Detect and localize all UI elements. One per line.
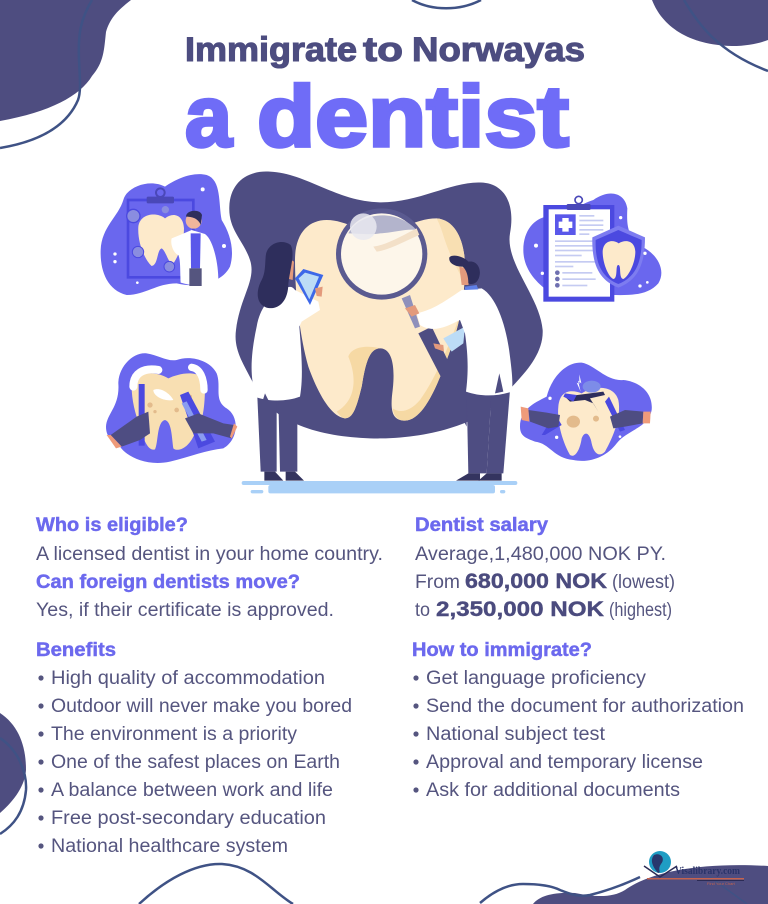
answer: licensed dentist: A licensed dentist in your home country. xyxy=(36,544,383,565)
highest salary xyxy=(415,598,672,621)
dentist: man with magnifier xyxy=(405,256,512,481)
background corner: top center arc xyxy=(412,0,481,8)
answer: certificate: Yes, if their certificate is approved. xyxy=(36,600,334,621)
list: benefits: Free post-secondary education xyxy=(51,808,326,829)
list: how to immigrate: Send the document for authorization xyxy=(426,696,744,717)
background corner: left middle blob xyxy=(0,713,26,834)
highest salary: 2,350,000 NOK xyxy=(436,598,604,621)
list: how to immigrate: National subject test xyxy=(426,724,606,745)
illustration: dentist with tooth chart xyxy=(101,174,232,295)
list: benefits xyxy=(36,640,352,857)
list: how to immigrate: Ask for additional documents xyxy=(426,780,680,801)
dark blob backdrop xyxy=(229,172,543,438)
logo rule xyxy=(647,878,744,880)
title line 1 xyxy=(185,31,585,69)
list: benefits: The environment is a priority xyxy=(51,724,298,745)
heading: how to immigrate: How to immigrate? xyxy=(412,640,592,661)
text block: dentist salary xyxy=(415,515,675,621)
logo wordmark: Visalibrary.com xyxy=(675,865,740,877)
dentist: woman with clipboard xyxy=(252,242,323,481)
heading: who is eligible: Who is eligible? xyxy=(36,515,188,536)
average salary: Average,1,480,000 NOK PY. xyxy=(415,544,666,565)
illustration: tooth with toothbrush and paste xyxy=(106,353,237,463)
text block: eligibility xyxy=(36,515,383,621)
list: benefits: Outdoor will never make you bored xyxy=(51,696,352,717)
lowest salary: From xyxy=(415,572,460,593)
floor xyxy=(242,481,517,493)
title line 2: a xyxy=(185,69,233,165)
logo tagline: Find Your Chart xyxy=(707,881,736,886)
logo book xyxy=(644,866,677,877)
background corner: bottom arc xyxy=(139,864,293,904)
tooth xyxy=(295,218,465,421)
logo globe xyxy=(649,851,671,873)
list: benefits: One of the safest places on Earth xyxy=(51,752,340,773)
logo: Visalibrary xyxy=(644,851,744,886)
list: how to immigrate xyxy=(412,640,744,801)
highest salary: (highest) xyxy=(609,600,672,621)
illustration: clipboard with shield xyxy=(523,194,661,302)
background corner: bottom right blob xyxy=(480,865,768,904)
heading: foreign dentists: Can foreign dentists move? xyxy=(36,572,300,593)
lowest salary: 680,000 NOK xyxy=(465,570,607,593)
list: how to immigrate: Get language proficiency xyxy=(426,668,647,689)
list: benefits: National healthcare system xyxy=(51,836,288,857)
lowest salary: (lowest) xyxy=(612,572,675,593)
magnifying glass xyxy=(336,208,467,427)
background corner: top right blob xyxy=(652,0,768,71)
heading: benefits: Benefits xyxy=(36,640,116,661)
illustration: cracked tooth xyxy=(520,363,652,461)
list: benefits: A balance between work and life xyxy=(51,780,333,801)
title line 1: to xyxy=(363,31,403,69)
highest salary: to xyxy=(415,600,430,621)
title line 2: dentist xyxy=(257,69,569,165)
title line 1: Immigrate xyxy=(185,31,357,69)
list: benefits: High quality of accommodation xyxy=(51,668,325,689)
title line 1: Norwayas xyxy=(412,31,585,69)
heading: salary: Dentist salary xyxy=(415,515,548,536)
background corner: top left blob xyxy=(0,0,131,148)
illustration: dentists examining tooth xyxy=(229,172,543,493)
lowest salary xyxy=(415,570,675,593)
list: how to immigrate: Approval and temporary license xyxy=(426,752,703,773)
